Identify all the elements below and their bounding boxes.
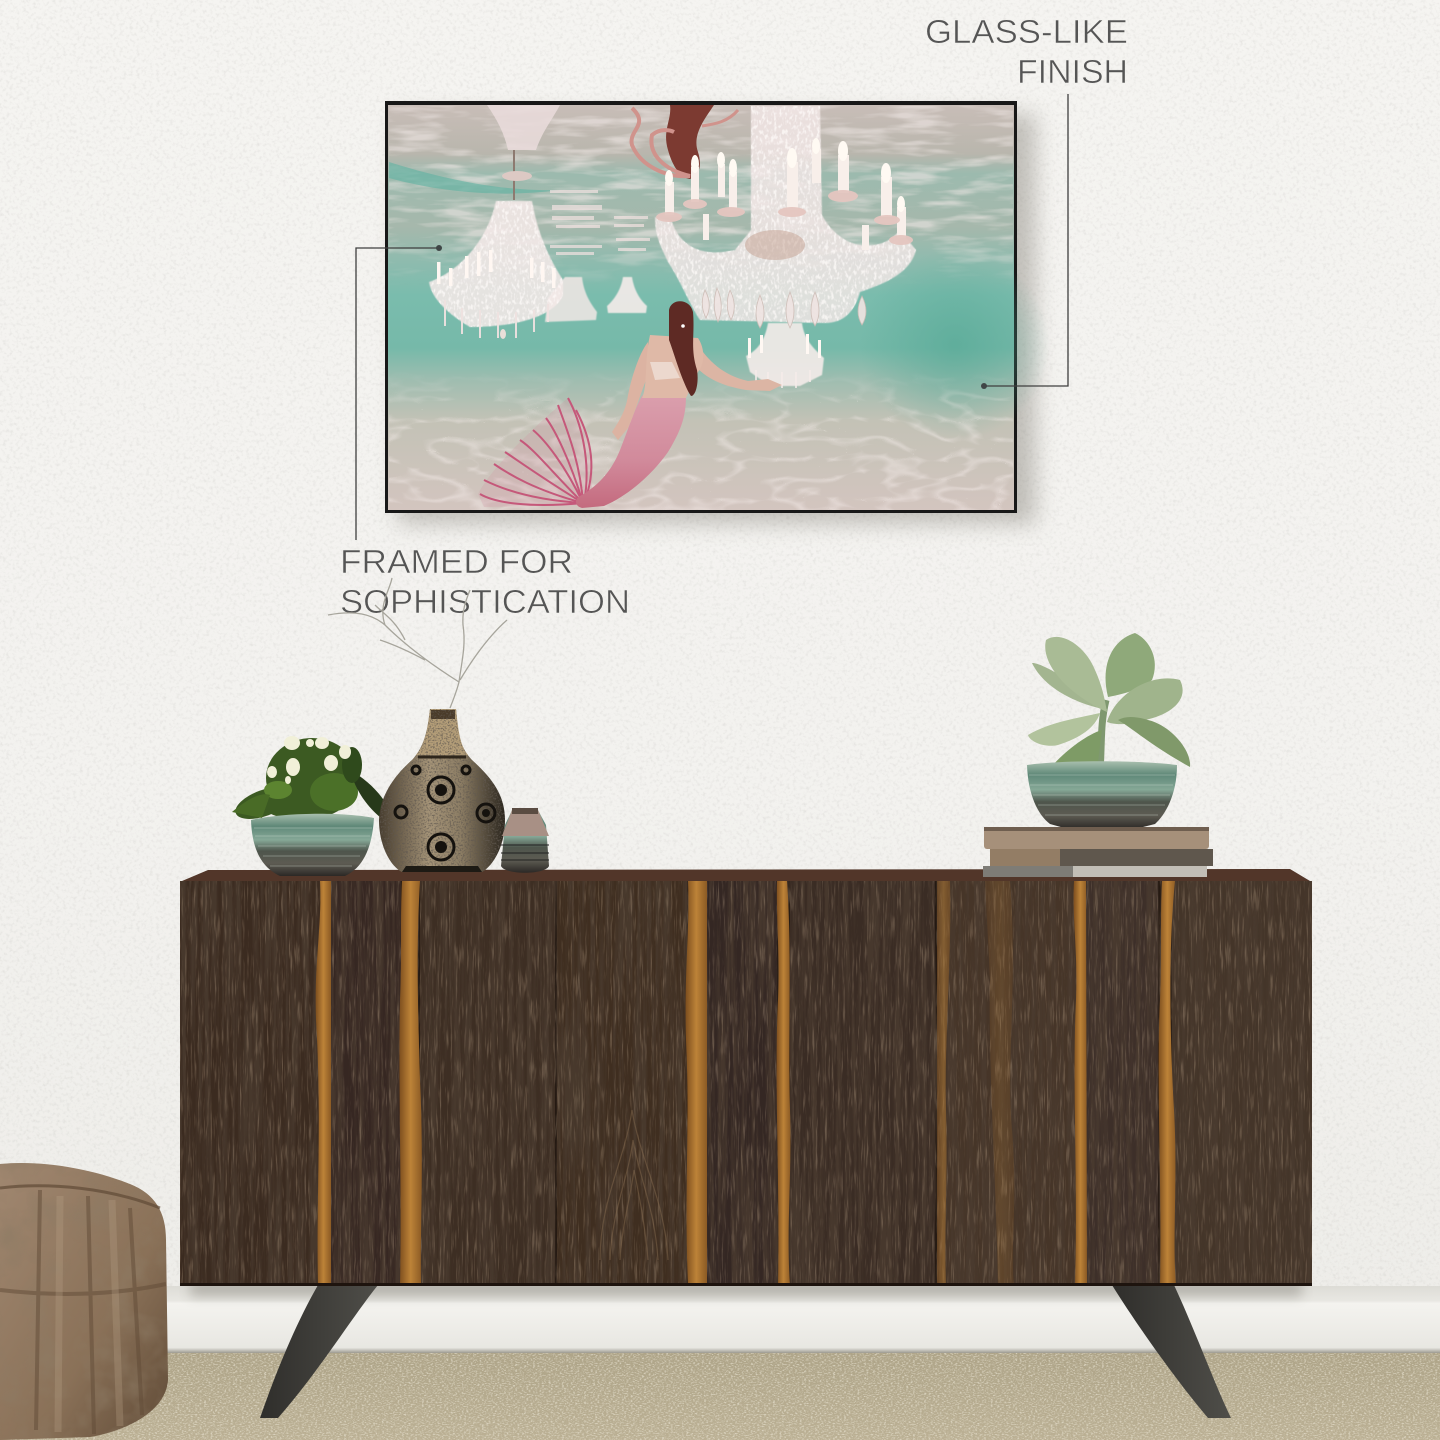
patterned vase	[378, 708, 506, 874]
chandelier: far right of left	[545, 277, 597, 322]
label: GLASS-LIKE	[925, 13, 1128, 50]
wood grain	[180, 881, 1312, 1285]
top surface	[182, 869, 1310, 881]
frame	[385, 101, 1017, 513]
chandelier: centre large	[650, 105, 920, 330]
wood figure lines	[600, 1110, 668, 1260]
sideboard legs	[260, 1285, 1231, 1418]
callout: framed for sophistication	[340, 245, 630, 620]
stack of books	[983, 827, 1213, 877]
baseboard	[0, 1286, 1440, 1353]
callout: glass-like finish	[925, 13, 1128, 389]
door panels	[180, 881, 1312, 1285]
pouf ottoman	[0, 1160, 170, 1440]
tail body	[576, 390, 686, 508]
left flowering plant	[231, 736, 398, 830]
chandelier: left	[425, 200, 570, 339]
hair	[669, 301, 698, 396]
leader line	[356, 248, 439, 540]
label: FRAMED FOR	[340, 543, 573, 580]
shadow beneath sideboard	[190, 1282, 1302, 1296]
chandelier: small far	[607, 277, 647, 313]
label	[340, 543, 630, 620]
small striped vase	[501, 808, 549, 873]
artwork shadow	[398, 114, 1036, 524]
live edge strips	[316, 881, 1176, 1285]
dot	[436, 245, 442, 251]
left striped bowl	[251, 814, 374, 876]
right succulent plant	[1028, 633, 1190, 773]
tail fin	[478, 398, 592, 507]
leader line	[984, 94, 1068, 386]
dot	[981, 383, 987, 389]
branches	[328, 578, 507, 708]
sideboard	[180, 869, 1312, 1286]
chandelier: top left	[487, 105, 560, 200]
reflection of mermaid	[632, 105, 738, 179]
body underlay	[180, 881, 1312, 1286]
chandelier: lower by hand	[746, 323, 824, 388]
label: FINISH	[1017, 53, 1128, 90]
label: SOPHISTICATION	[340, 583, 630, 620]
carpet floor	[0, 1353, 1440, 1440]
underwater photo	[388, 105, 1050, 510]
framed artwork	[385, 101, 1050, 513]
label	[925, 13, 1128, 90]
mermaid	[478, 301, 782, 508]
surface light streaks	[550, 190, 650, 255]
left arm	[612, 342, 648, 440]
right striped bowl	[1027, 761, 1177, 829]
right arm	[692, 345, 782, 391]
torso	[642, 335, 703, 398]
